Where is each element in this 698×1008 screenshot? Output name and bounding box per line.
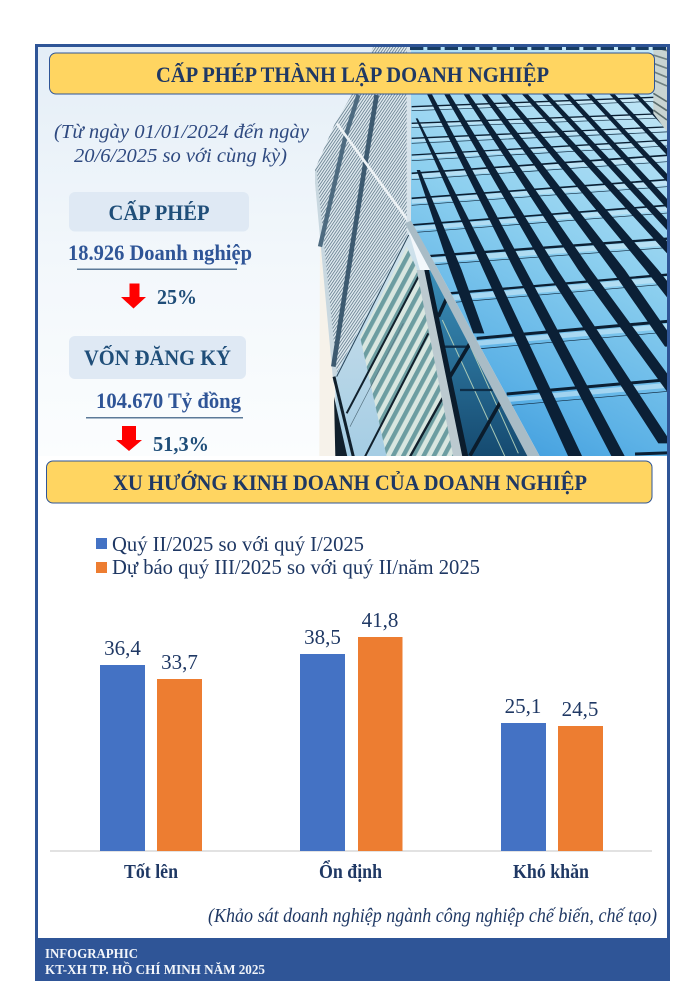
pill label: cấp phép: CẤP PHÉP [108,200,210,225]
group: ổn định [300,608,402,883]
group: khó khăn: 25,1 [505,694,541,718]
chart legend: Dự báo quý III/2025 so với quý II/năm 2025 [112,555,480,579]
dark diagonal mullions [416,94,667,456]
footer band: KT-XH TP. HỒ CHÍ MINH NĂM 2025 [45,962,265,977]
chart legend [96,532,480,579]
group: khó khăn: 24,5 [562,697,598,721]
pill label: vốn đăng ký [69,336,246,379]
bar chart [50,608,652,883]
corner glass panel [417,270,529,457]
heading: cấp phép thành lập doanh nghiệp [50,53,654,94]
top right pale corner [653,43,667,132]
group: tốt lên: 33,7 [161,650,198,674]
value: 25 percent: 25% [157,285,197,309]
footer band: INFOGRAPHIC [45,946,138,961]
panel: cấp phép [68,192,252,309]
photo: glass office building [314,43,685,457]
text block: date range [54,121,310,167]
group: tốt lên: Tốt lên [124,861,178,883]
group: ổn định: Ổn định [319,859,382,883]
group: khó khăn: Khó khăn [513,861,589,883]
heading: xu hướng kinh doanh [46,461,652,503]
text block: date range: (Từ ngày 01/01/2024 đến ngày [54,121,310,143]
heading: xu hướng kinh doanh: XU HƯỚNG KINH DOANH CỦA DOANH NGHIỆP [113,469,587,495]
panel: vốn đăng ký [69,336,246,456]
heading: cấp phép thành lập doanh nghiệp: CẤP PHÉP THÀNH LẬP DOANH NGHIỆP [156,61,549,87]
value: số doanh nghiệp: 18.926 Doanh nghiệp [68,240,252,265]
footer band [35,938,669,980]
group: tốt lên: 36,4 [104,636,141,660]
pill label: vốn đăng ký: VỐN ĐĂNG KÝ [84,345,231,370]
top edge strip [410,47,666,50]
corner edge band [405,221,540,457]
icon: red down arrow [116,426,142,451]
pill label: cấp phép [69,192,249,232]
right glass facade [405,43,685,457]
value: 51,3 percent: 51,3% [153,432,209,456]
value: tỷ đồng: 104.670 Tỷ đồng [96,388,241,413]
chart legend: Quý II/2025 so với quý I/2025 [112,532,364,556]
text block: date range: 20/6/2025 so với cùng kỳ) [74,145,287,167]
group: ổn định: 38,5 [304,625,341,649]
icon: red down arrow [121,284,146,308]
group: tốt lên [100,636,202,883]
group: khó khăn [501,694,603,883]
group: ổn định: 41,8 [362,608,398,632]
